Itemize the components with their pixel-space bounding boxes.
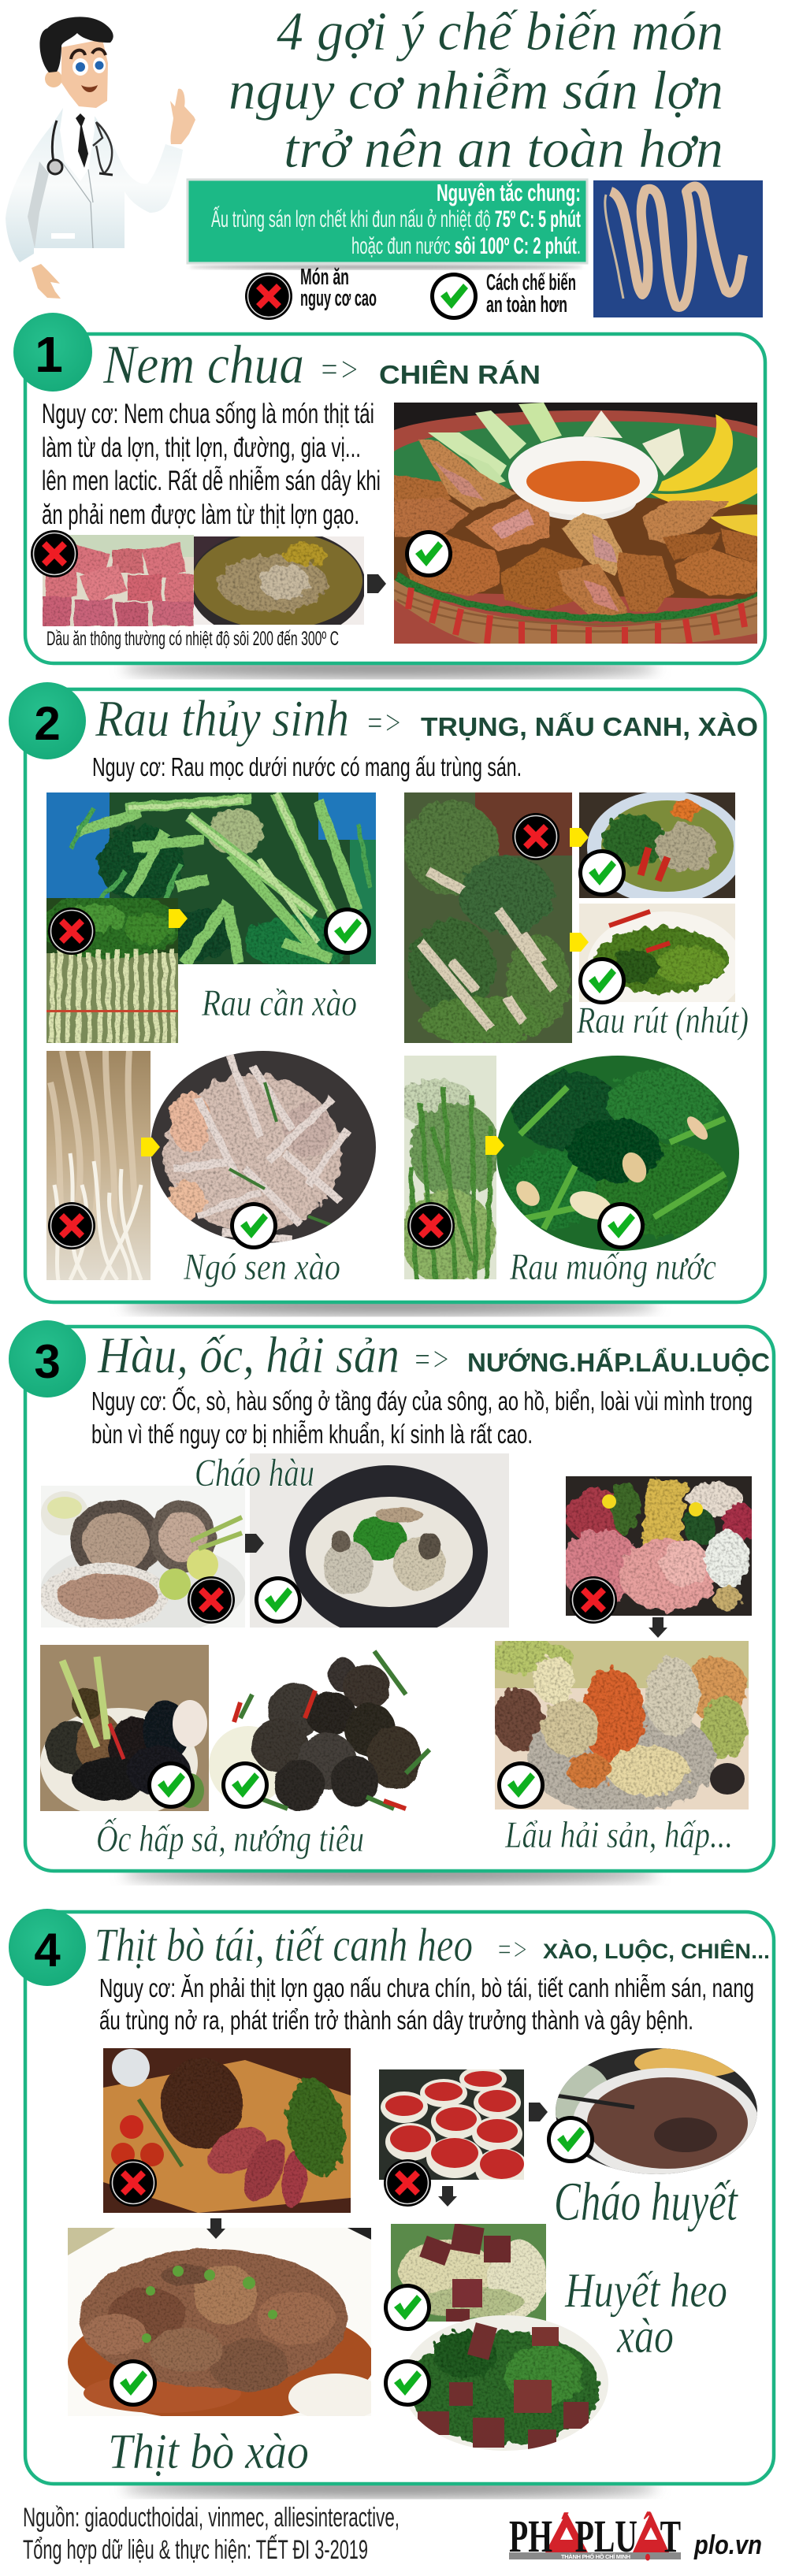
source note: Nguồn: giaoducthoidai, vinmec, alliesinteractive, xyxy=(23,2503,400,2533)
icon: risk xyxy=(48,908,95,955)
panel: general principle box: Ấu trùng sán lợn chết khi đun nấu ở nhiệt độ 75º C: 5 phút xyxy=(211,206,581,232)
heading: hau, oc, hai san: NƯỚNG.HẤP.LẨU.LUỘC xyxy=(467,1347,770,1377)
heading: hau, oc, hai san xyxy=(97,1327,770,1384)
heading: nem chua: Nem chua xyxy=(102,335,304,395)
heading: thit bo tai, tiet canh heo xyxy=(95,1919,770,1971)
photo: stir-fried celery xyxy=(46,792,376,964)
photo: rau rut stir-fry xyxy=(579,904,735,1002)
photo: stir-fried water spinach xyxy=(496,1056,739,1251)
heading: nem chua: CHIÊN RÁN xyxy=(379,360,541,389)
icon: safe xyxy=(578,957,626,1004)
icon: risk xyxy=(48,1202,95,1249)
icon: safe xyxy=(597,1202,645,1249)
photo: fried nem chua xyxy=(394,403,757,644)
title xyxy=(229,2,723,180)
heading: thit bo tai, tiet canh heo: => xyxy=(496,1932,528,1967)
icon: safe xyxy=(255,1576,302,1624)
photo: raw nem chua xyxy=(43,535,194,626)
icon: risk xyxy=(407,1202,455,1249)
arrow: to fried nem xyxy=(367,574,386,593)
text: risk: bùn vì thế nguy cơ bị nhiễm khuẩn, kí sinh là rất cao. xyxy=(91,1420,533,1449)
photo: stir-fried beef xyxy=(68,2228,371,2416)
icon: risk xyxy=(512,813,559,860)
panel 2: rau thuy sinh xyxy=(9,682,765,1302)
label: rau muong nuoc: Rau muống nước xyxy=(509,1246,716,1288)
arrow xyxy=(438,2186,457,2207)
photo: raw water spinach xyxy=(404,1056,496,1279)
photo: grilled snails xyxy=(209,1650,432,1811)
logo: Phap Luat: plo.vn xyxy=(693,2530,762,2560)
label: huyet heo xao: xào xyxy=(616,2310,674,2363)
arrow xyxy=(485,1136,504,1155)
photo: frying oil xyxy=(194,536,364,625)
photo: stir-fried blood pudding xyxy=(408,2315,608,2451)
label: rau can xao: Rau cần xào xyxy=(201,982,357,1024)
heading: thit bo tai, tiet canh heo: Thịt bò tái, tiết canh heo xyxy=(95,1919,473,1971)
text: risk: làm từ da lợn, thịt lợn, đường, gia vị... xyxy=(42,432,361,463)
icon: safe xyxy=(547,2116,594,2163)
photo: steamed snails xyxy=(40,1645,209,1811)
icon: safe xyxy=(324,908,371,955)
panel: general principle box: hoặc đun nước sôi 100º C: 2 phút. xyxy=(351,233,581,259)
number badge 2: 2 xyxy=(34,697,61,750)
icon: safe xyxy=(384,2359,431,2407)
photo: raw water celery xyxy=(46,898,178,1043)
panel: general principle box: Nguyên tắc chung: xyxy=(437,178,581,206)
heading: rau thuy sinh xyxy=(95,690,758,748)
text: risk: Nguy cơ: Rau mọc dưới nước có mang ấu trùng sán. xyxy=(92,752,522,781)
icon: doctor illustration xyxy=(6,17,195,299)
number badge 3: 3 xyxy=(34,1335,61,1388)
photo: blood with bean sprouts xyxy=(391,2223,547,2322)
icon: safe xyxy=(221,1761,269,1809)
text: risk xyxy=(42,399,381,530)
source note: Tổng hợp dữ liệu & thực hiện: TẾT ĐI 3-2019 xyxy=(23,2535,368,2565)
photo: raw lotus stems xyxy=(46,1051,151,1280)
title: trở nên an toàn hơn xyxy=(284,119,723,180)
text: risk: ăn phải nem được làm từ thịt lợn gạo. xyxy=(42,499,359,530)
icon: risk xyxy=(110,2159,157,2207)
logo: Phap Luat: PHÁPLUẬT xyxy=(509,2511,681,2562)
arrow xyxy=(570,933,589,952)
label: rau rut: Rau rút (nhút) xyxy=(576,1000,749,1041)
icon: safe xyxy=(405,530,452,577)
label: huyet heo xao xyxy=(564,2264,727,2363)
text: risk xyxy=(99,1973,754,2035)
icon: safe xyxy=(147,1761,195,1809)
arrow xyxy=(570,828,589,847)
legend: safer cooking xyxy=(430,270,576,320)
number badge 1 xyxy=(13,313,92,392)
label: huyet heo xao: Huyết heo xyxy=(564,2264,727,2318)
arrow xyxy=(529,2103,548,2121)
panel 3: hau, oc, hai san xyxy=(9,1320,774,1871)
bowl of sauce xyxy=(508,436,658,521)
icon: risk xyxy=(31,530,78,577)
heading: hau, oc, hai san: => xyxy=(413,1340,450,1379)
icon: safe xyxy=(110,2359,157,2407)
legend: risky dish: nguy cơ cao xyxy=(300,286,377,311)
heading: rau thuy sinh: Rau thủy sinh xyxy=(95,690,349,748)
photo: stir-fried lotus stems xyxy=(151,1051,376,1243)
text: risk: lên men lactic. Rất dễ nhiễm sán dây khi xyxy=(42,466,381,496)
photo: tapeworm xyxy=(593,180,763,317)
legend: risky dish xyxy=(245,265,377,320)
label: thit bo xao: Thịt bò xào xyxy=(108,2423,309,2479)
label: oc hap sa, nuong tieu: Ốc hấp sả, nướng tiêu xyxy=(96,1817,364,1860)
heading: hau, oc, hai san: Hàu, ốc, hải sản xyxy=(97,1327,400,1384)
panel 4: thit bo tai, tiet canh heo xyxy=(9,1909,774,2484)
photo: raw oysters xyxy=(41,1486,245,1628)
legend: risky dish: Món ăn xyxy=(300,265,349,290)
photo: steak xyxy=(103,2048,351,2213)
arrow xyxy=(141,1138,160,1156)
arrow xyxy=(245,1534,264,1553)
title: nguy cơ nhiễm sán lợn xyxy=(229,61,723,121)
legend: safer cooking: an toàn hơn xyxy=(486,292,567,317)
label: chao hau: Cháo hàu xyxy=(195,1450,314,1494)
arrow xyxy=(169,909,188,928)
heading: rau thuy sinh: => xyxy=(366,703,402,742)
text: risk xyxy=(91,1386,753,1449)
title: 4 gợi ý chế biến món xyxy=(277,2,723,62)
icon: safe xyxy=(578,849,626,896)
photo: raw rau rut xyxy=(404,792,572,1043)
number badge 1: 1 xyxy=(35,326,63,383)
icon: safe xyxy=(230,1202,277,1249)
number badge 4 xyxy=(9,1909,86,1986)
photo: oyster porridge xyxy=(250,1453,509,1628)
panel: general principle box xyxy=(188,178,587,269)
heading: nem chua xyxy=(102,335,541,395)
heading: nem chua: => xyxy=(319,349,359,389)
logo: Phap Luat: THÀNH PHỐ HỒ CHÍ MINH xyxy=(561,2552,630,2560)
number badge 2 xyxy=(9,682,86,759)
label: ngo sen xao: Ngó sen xào xyxy=(183,1246,340,1288)
icon: risk xyxy=(188,1576,235,1624)
caption: oil temperature: Dầu ăn thông thường có nhiệt độ sôi 200 đến 300º C xyxy=(46,628,339,650)
number badge 3 xyxy=(9,1320,86,1397)
panel 1: nem chua xyxy=(13,313,765,663)
icon: risk xyxy=(570,1576,617,1624)
label: lau hai san, hap: Lẩu hải sản, hấp... xyxy=(504,1814,733,1856)
arrow xyxy=(206,2218,225,2239)
photo: rau rut soup xyxy=(579,792,735,898)
text: risk: Nguy cơ: Nem chua sống là món thịt tái xyxy=(42,399,374,429)
icon: safe xyxy=(384,2284,431,2331)
number badge 4: 4 xyxy=(34,1924,61,1977)
photo: raw seafood sashimi xyxy=(566,1476,752,1616)
icon: safe xyxy=(497,1761,545,1809)
arrow xyxy=(649,1617,667,1638)
icon: risk xyxy=(384,2159,431,2207)
heading: rau thuy sinh: TRỤNG, NẤU CANH, XÀO xyxy=(421,712,758,741)
legend: safer cooking: Cách chế biến xyxy=(486,270,576,295)
heading: thit bo tai, tiet canh heo: XÀO, LUỘC, CHIÊN... xyxy=(543,1939,770,1963)
source note xyxy=(23,2503,400,2565)
photo: seafood hotpot xyxy=(495,1641,749,1810)
photo: blood pudding bowls xyxy=(379,2066,529,2189)
photo: blood porridge xyxy=(556,2048,757,2174)
